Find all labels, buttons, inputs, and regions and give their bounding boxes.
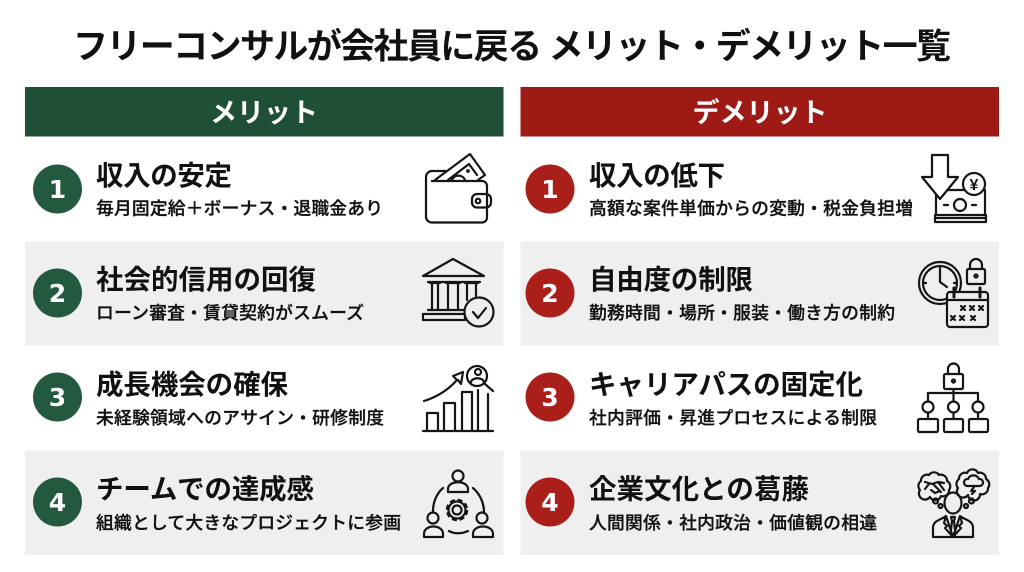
merit row 2: 2	[49, 279, 66, 308]
demerit row 4: 4	[541, 488, 559, 517]
icon: locked org chart	[918, 364, 988, 432]
demerit row 2	[520, 242, 999, 346]
merit row 4: 組織として大きなプロジェクトに参画	[96, 513, 401, 533]
merit row 2	[25, 242, 504, 346]
merit row 1: 毎月固定給＋ボーナス・退職金あり	[96, 198, 383, 218]
heading: demerits: デメリット	[692, 97, 828, 128]
merit row 3: 3	[49, 383, 66, 412]
merit row 4: チームでの達成感	[96, 474, 314, 504]
demerit row 1: 1	[541, 175, 559, 204]
demerit row 4	[520, 450, 999, 555]
merit row 1	[25, 137, 504, 241]
demerit row 1: 収入の低下	[589, 160, 725, 191]
demerit row 4: 人間関係・社内政治・価値観の相違	[589, 513, 877, 533]
panel: merits	[25, 87, 504, 555]
icon: income down: ¥	[970, 177, 979, 194]
merit row 3: 成長機会の確保	[96, 369, 288, 400]
heading: demerits	[520, 87, 999, 136]
demerit row 2: 2	[541, 279, 559, 308]
merit row 4: 4	[49, 488, 66, 517]
icon: conflicted businessperson	[918, 469, 989, 537]
panel: demerits	[520, 87, 999, 555]
icon: bank with check	[423, 259, 494, 326]
merit row 1: 1	[49, 175, 66, 204]
icon: income down	[922, 155, 986, 222]
demerit row 3: 3	[541, 383, 559, 412]
merit row 1: 収入の安定	[96, 160, 232, 191]
merit row 4	[25, 450, 504, 555]
demerit row 3: 社内評価・昇進プロセスによる制限	[589, 408, 877, 428]
heading: merits: メリット	[210, 98, 318, 128]
merit row 2: 社会的信用の回復	[96, 264, 316, 295]
merit row 3: 未経験領域へのアサイン・研修制度	[96, 408, 384, 428]
demerit row 1: 高額な案件単価からの変動・税金負担増	[589, 198, 913, 218]
merit row 2: ローン審査・賃貸契約がスムーズ	[96, 302, 364, 323]
demerit row 3	[520, 346, 999, 450]
icon: team and gear	[424, 470, 493, 537]
demerit row 1	[520, 137, 999, 241]
heading: merits	[25, 87, 504, 136]
demerit row 2: 自由度の制限	[589, 264, 753, 295]
merit row 3	[25, 346, 504, 450]
icon: growth chart	[423, 366, 493, 431]
demerit row 2: 勤務時間・場所・服装・働き方の制約	[589, 303, 895, 323]
demerit row 4: 企業文化との葛藤	[589, 474, 810, 504]
title: フリーコンサルが会社員に戻る メリット・デメリット一覧	[73, 26, 951, 66]
icon: clock, lock and calendar	[919, 259, 988, 327]
demerit row 3: キャリアパスの固定化	[589, 369, 863, 400]
icon: wallet	[426, 154, 491, 223]
